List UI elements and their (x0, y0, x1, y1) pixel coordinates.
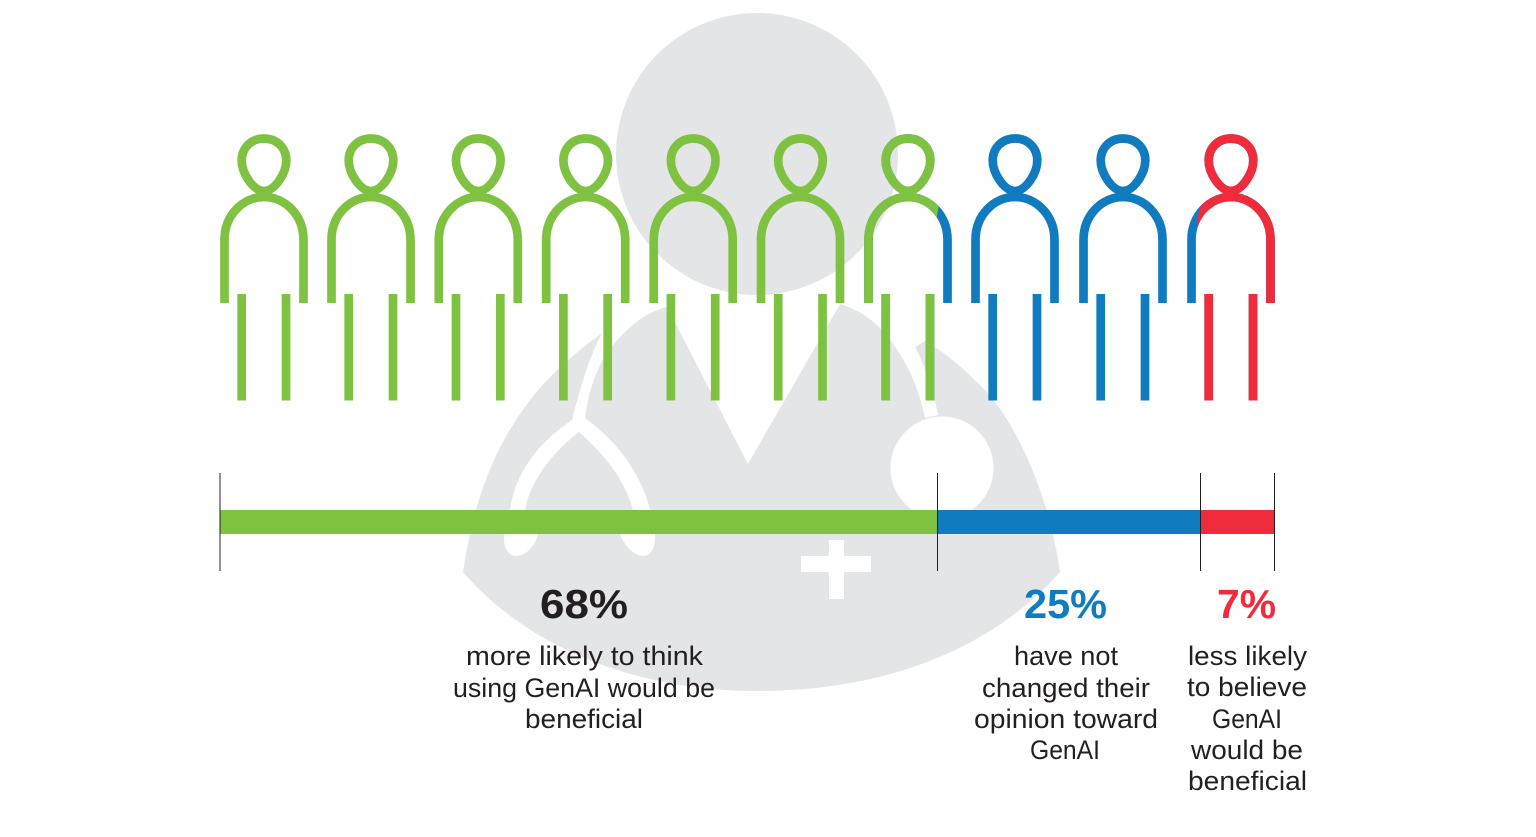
stethoscope chest piece (890, 416, 994, 520)
description 7%: beneficial (1188, 766, 1307, 796)
description 68%: more likely to think (466, 641, 704, 671)
description 68%: using GenAI would be (453, 673, 715, 703)
value 7%: 7% (1217, 581, 1276, 627)
value 25%: 25% (1024, 581, 1107, 627)
person 1 green (224, 138, 304, 400)
background icon: doctor silhouette (463, 13, 1060, 691)
person 2 green (332, 138, 410, 400)
description 68%: beneficial (525, 704, 643, 734)
person 7 green and blue (868, 138, 948, 400)
description 25%: opinion toward (974, 704, 1158, 734)
person 5 green (654, 138, 733, 400)
description 7%: would be (1190, 735, 1303, 765)
green segment 68% (220, 510, 937, 534)
stat: 25% (974, 581, 1158, 765)
red segment 7% (1200, 510, 1275, 534)
description 25%: changed their (982, 673, 1150, 703)
person 4 green (546, 138, 625, 400)
person 3 green (439, 138, 518, 400)
person 9 blue (1084, 138, 1162, 400)
stethoscope branches and ear tips (504, 418, 655, 556)
description 7%: less likely (1188, 641, 1308, 671)
person 8 blue (976, 138, 1054, 400)
stat: 7% (1187, 581, 1308, 796)
description 25%: GenAI (1030, 735, 1100, 765)
description 25%: have not (1014, 641, 1118, 671)
stacked percentage bar (220, 473, 1275, 571)
person 10 red and blue (1192, 138, 1270, 400)
description 7%: GenAI (1212, 704, 1282, 734)
doctor body (463, 304, 1060, 691)
person 6 green (761, 138, 840, 400)
doctor head (616, 13, 898, 295)
value 68%: 68% (540, 581, 628, 627)
row of ten people icons (224, 138, 1270, 400)
stat: 68% (453, 581, 715, 734)
medical cross (801, 540, 871, 599)
description 7%: to believe (1187, 672, 1307, 702)
blue segment 25% (937, 510, 1200, 534)
